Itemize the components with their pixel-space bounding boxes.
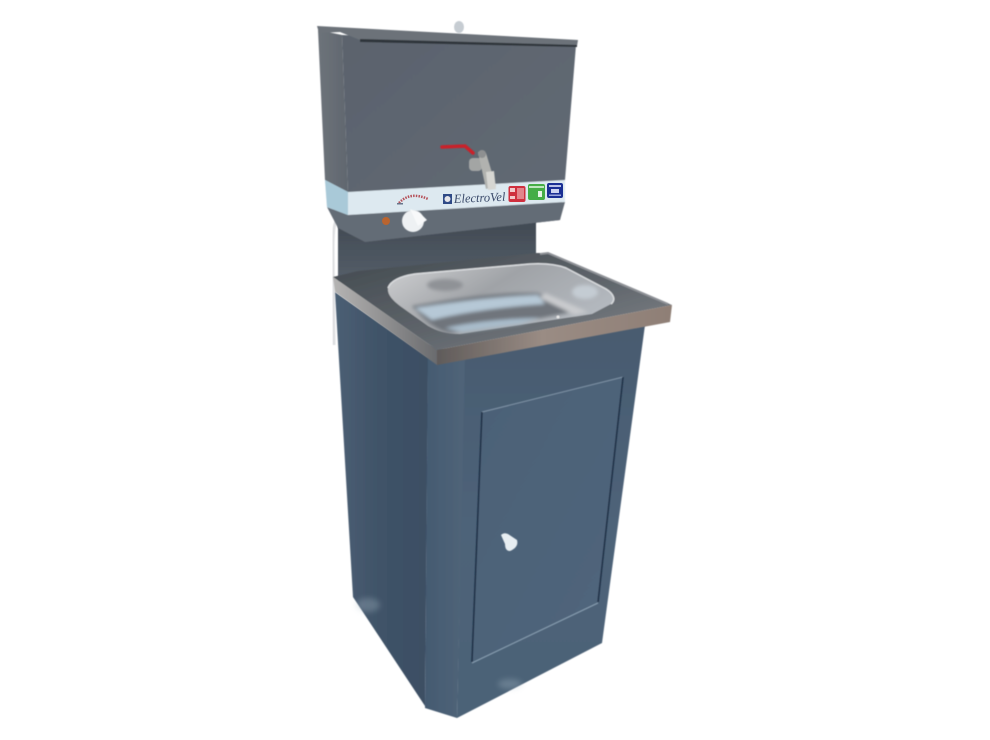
cabinet door xyxy=(472,377,623,663)
sink front edge xyxy=(437,305,672,365)
basin bowl xyxy=(388,264,614,334)
tank front face xyxy=(342,35,576,242)
power cord xyxy=(333,216,341,345)
label band xyxy=(325,180,565,215)
green badge xyxy=(528,184,545,200)
back panel below the tank xyxy=(338,214,536,282)
ElectroVel logo: ElectroVel xyxy=(453,190,506,206)
stainless steel sink xyxy=(333,253,672,365)
cabinet chamfered corner xyxy=(425,345,466,718)
door knob xyxy=(501,533,517,551)
sink left edge xyxy=(333,277,437,365)
water tank xyxy=(317,26,578,242)
tank lid xyxy=(317,26,578,47)
tap with red lever xyxy=(442,146,496,190)
water filler cap on the tank lid xyxy=(454,21,464,33)
cabinet front xyxy=(457,325,645,718)
blue badge xyxy=(547,183,563,198)
lower control housing xyxy=(327,202,565,242)
temperature scale xyxy=(397,196,428,204)
sink top surface xyxy=(333,253,672,350)
cabinet left side xyxy=(335,292,432,706)
indicator lamp xyxy=(382,217,390,225)
raised rear rim xyxy=(540,253,668,304)
tank side face xyxy=(318,30,365,242)
thermostat knob xyxy=(402,209,427,232)
cabinet xyxy=(335,292,645,718)
light reflections near the floor xyxy=(356,598,522,689)
red badge xyxy=(508,186,526,202)
